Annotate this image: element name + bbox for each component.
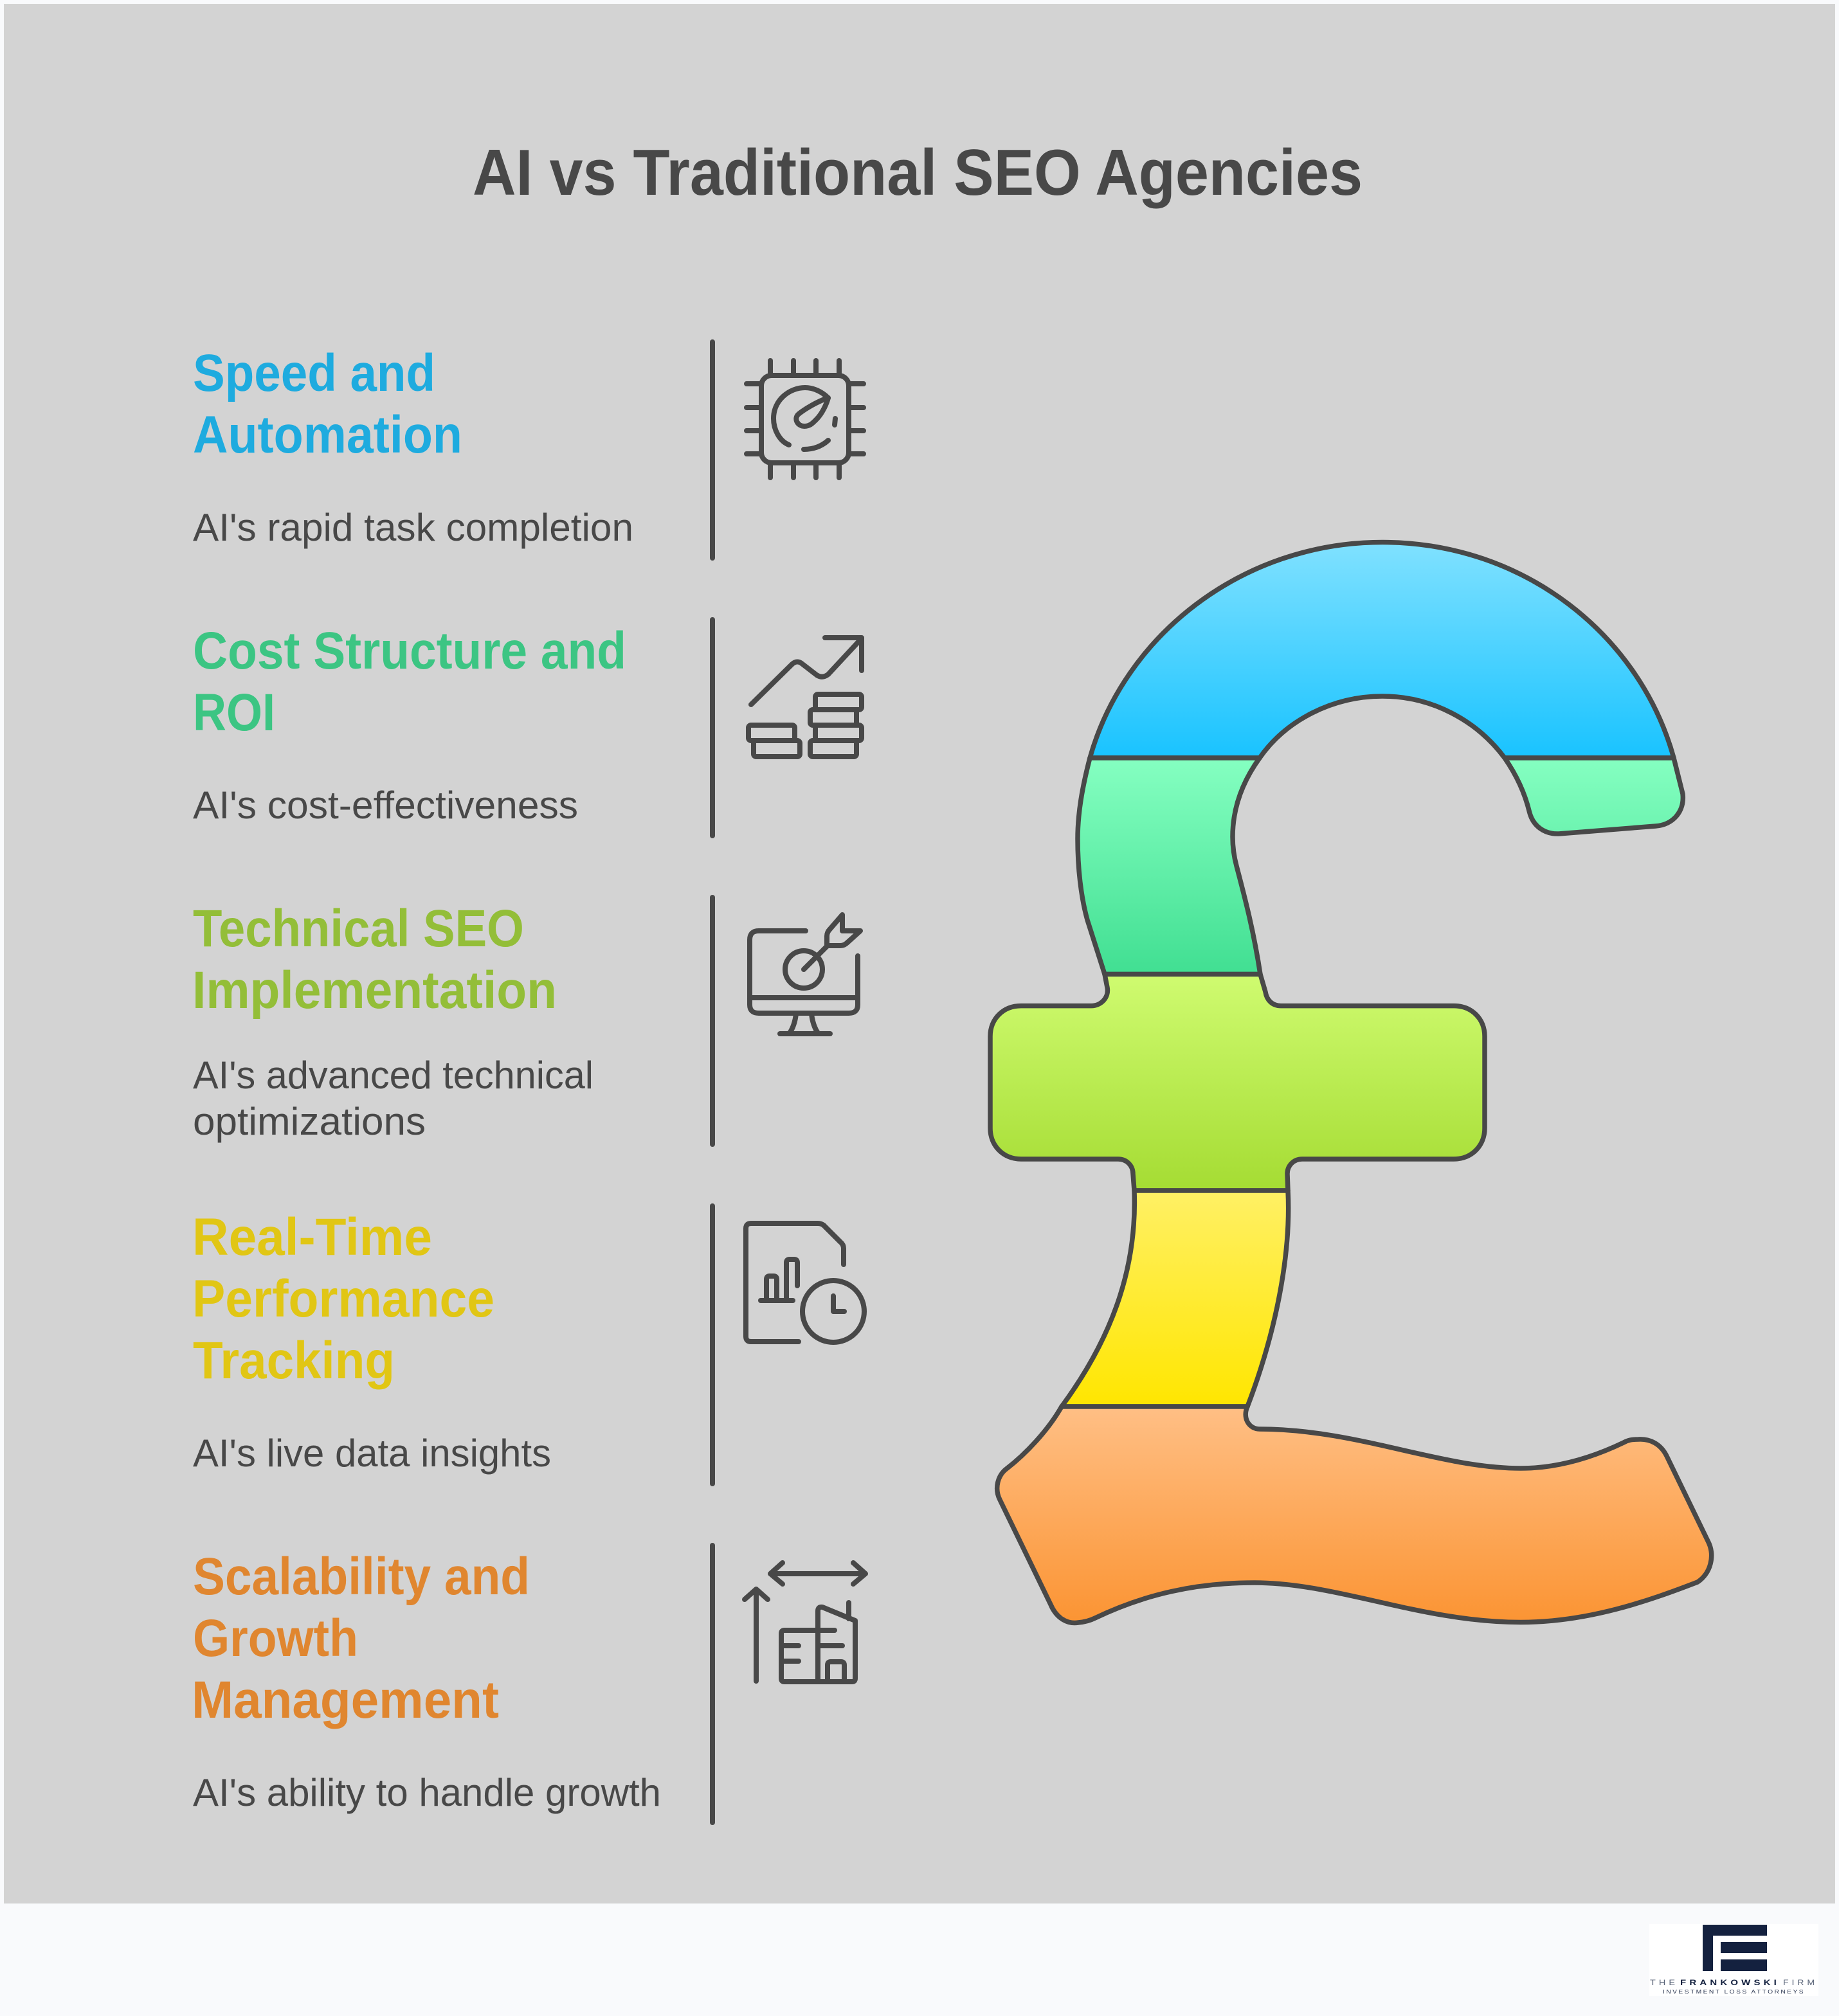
heading: speed and automation (193, 344, 462, 464)
heading: real-time performance tracking: Tracking (193, 1331, 395, 1390)
heading: technical SEO implementation: Implementation (192, 961, 557, 1020)
description: advanced technical optimizations: AI's advanced technical (193, 1054, 593, 1097)
logo background (1649, 1924, 1818, 1996)
panel: technical SEO implementation (192, 897, 860, 1144)
icon: chip with gauge (747, 361, 864, 478)
description: ability to handle growth: AI's ability to handle growth (193, 1771, 661, 1814)
panel: speed and automation (193, 342, 864, 558)
icon: rising chart and coins (748, 638, 862, 757)
heading: scalability and growth management (192, 1547, 530, 1729)
panel: cost structure and ROI (193, 620, 862, 836)
heading: speed and automation: Speed and (193, 344, 435, 402)
logo: The Frankowski Firm (1649, 1924, 1818, 1996)
description: advanced technical optimizations (193, 1054, 593, 1143)
panel: scalability and growth management (192, 1545, 865, 1823)
segment: lime crossbar (990, 975, 1485, 1191)
logo mark (1703, 1925, 1767, 1971)
chart: pound sign made of five coloured segments (990, 543, 1712, 1623)
heading: real-time performance tracking: Real-Time (192, 1208, 432, 1266)
segment: green hook end (1505, 758, 1683, 834)
logo wordmark: FIRM (1783, 1979, 1818, 1987)
segment: yellow lower stem (1062, 1191, 1289, 1407)
description: cost-effectiveness: AI's cost-effectiveness (193, 784, 578, 827)
logo wordmark: THE (1650, 1979, 1678, 1987)
icon: monitor with target and dart (750, 915, 860, 1034)
heading: real-time performance tracking: Performance (192, 1270, 494, 1328)
segment: green stem (1078, 758, 1260, 975)
logo wordmark (1650, 1979, 1818, 1987)
icon: arrows and buildings (745, 1563, 865, 1682)
heading: real-time performance tracking (192, 1208, 494, 1390)
title: AI vs Traditional SEO Agencies (473, 137, 1363, 209)
segment: orange base (997, 1407, 1712, 1623)
heading: scalability and growth management: Management (192, 1671, 499, 1729)
heading: technical SEO implementation: Technical SEO (193, 899, 524, 958)
vertical divider 2 (710, 620, 715, 836)
heading: scalability and growth management: Growth (193, 1609, 358, 1668)
heading: cost structure and ROI: ROI (193, 683, 275, 742)
heading: technical SEO implementation (192, 899, 557, 1020)
heading: scalability and growth management: Scalability and (193, 1547, 530, 1606)
vertical divider 4 (710, 1206, 715, 1484)
logo wordmark: FRANKOWSKI (1680, 1979, 1780, 1987)
icon: report with bars and clock (746, 1223, 864, 1342)
panel: real-time performance tracking (192, 1206, 864, 1484)
segment: blue arch (1090, 543, 1674, 758)
vertical divider 1 (710, 342, 715, 558)
vertical divider 5 (710, 1545, 715, 1823)
vertical divider 3 (710, 897, 715, 1144)
logo tagline: INVESTMENT LOSS ATTORNEYS (1663, 1988, 1805, 1995)
description: rapid task completion: AI's rapid task completion (193, 506, 633, 549)
description: advanced technical optimizations: optimizations (193, 1100, 426, 1143)
heading: speed and automation: Automation (193, 406, 462, 464)
heading: cost structure and ROI (193, 622, 626, 742)
heading: cost structure and ROI: Cost Structure and (193, 622, 626, 680)
description: live data insights: AI's live data insights (193, 1432, 551, 1475)
